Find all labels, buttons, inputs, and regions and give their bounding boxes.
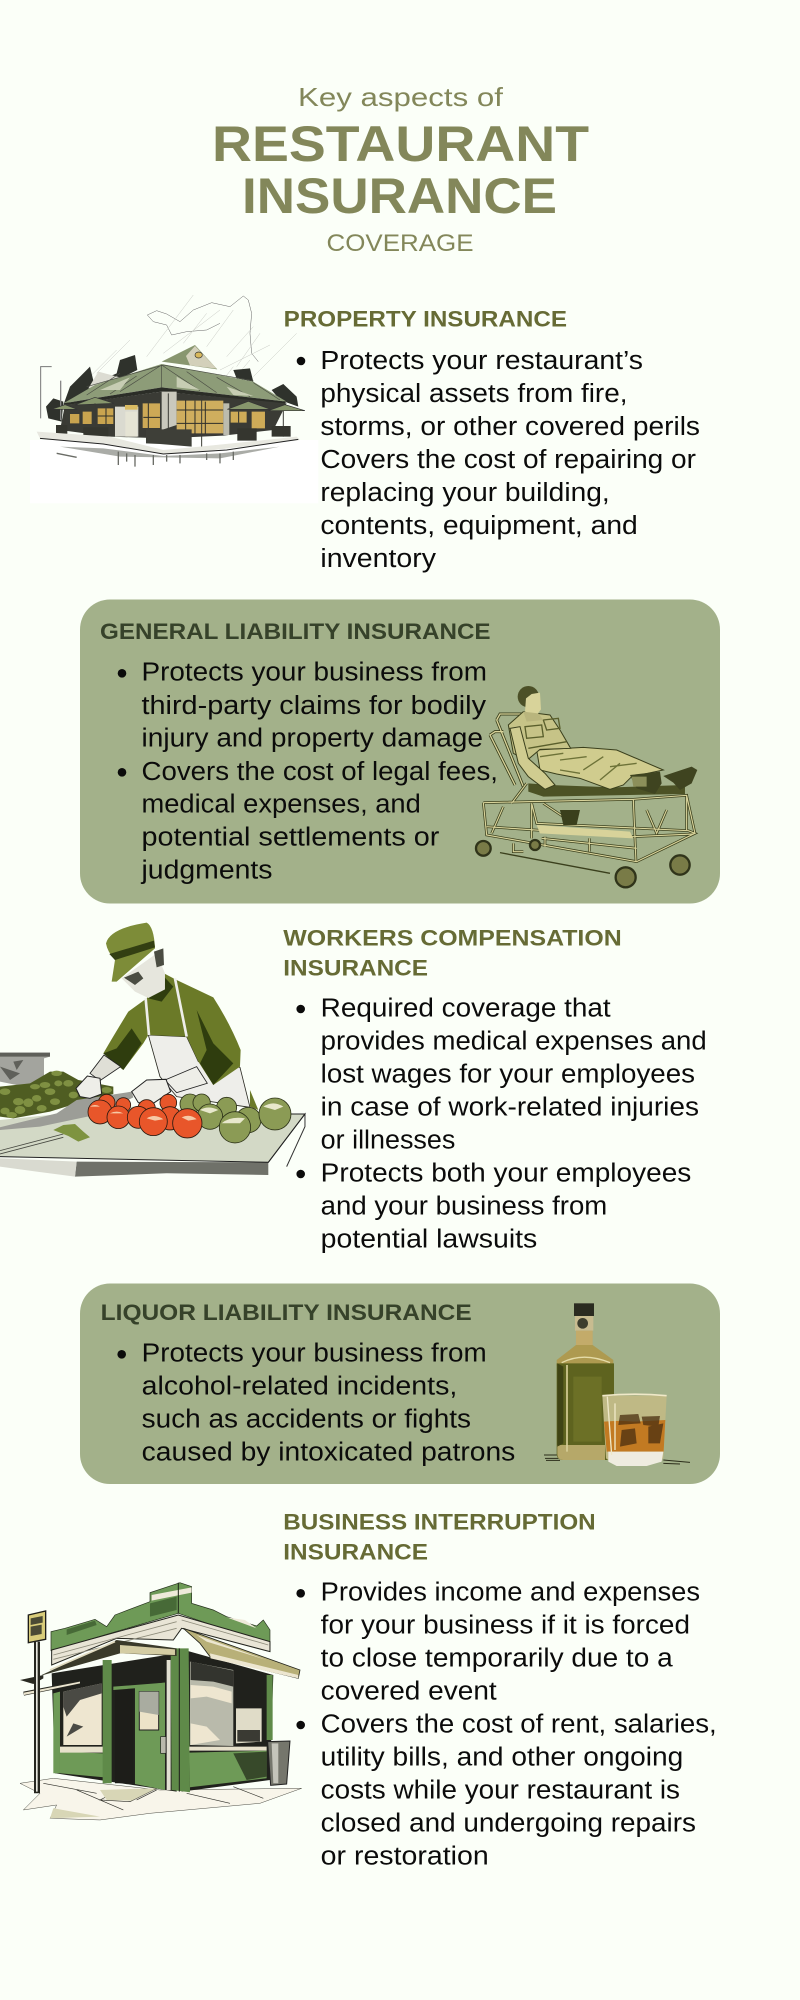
- bullet list: [321, 1579, 717, 1871]
- bullet list: in case of work-related injuries: [321, 1094, 699, 1122]
- bottle: [574, 1303, 594, 1316]
- bullet list: or illnesses: [321, 1126, 455, 1154]
- gurney frame: [483, 783, 695, 862]
- legs: [537, 747, 663, 789]
- illustration: whisky bottle and glass: [544, 1303, 690, 1466]
- walls: [52, 1648, 273, 1792]
- title block: [212, 82, 589, 257]
- boots: [630, 767, 697, 794]
- torso: [508, 712, 571, 761]
- bullet list: caused by intoxicated patrons: [142, 1439, 515, 1467]
- mattress: [528, 783, 685, 797]
- wheels: [476, 840, 690, 887]
- bullet list: replacing your building,: [320, 479, 610, 507]
- bullet list: [321, 995, 707, 1254]
- bullet list: injury and property damage: [142, 725, 483, 753]
- title: restaurant: RESTAURANT: [212, 116, 589, 172]
- bullet dot: [297, 357, 305, 365]
- bullet list: Protects both your employees: [321, 1160, 691, 1188]
- bullet list: Protects your business from: [142, 659, 487, 687]
- heading: INSURANCE: [283, 1539, 428, 1564]
- text: property insurance: [284, 307, 700, 573]
- glass: [602, 1396, 667, 1466]
- title: intro line: Key aspects of: [298, 82, 504, 112]
- bullet list: utility bills, and other ongoing: [321, 1744, 683, 1772]
- apron: [148, 1035, 250, 1107]
- bullet list: lost wages for your employees: [321, 1060, 695, 1088]
- heading: LIQUOR LIABILITY INSURANCE: [101, 1300, 472, 1325]
- bullet dots: [118, 669, 126, 777]
- sign on a pole: [34, 1642, 40, 1793]
- panel background: [80, 1284, 720, 1484]
- panel: general liability insurance: [80, 600, 720, 904]
- roof gable: [162, 345, 217, 369]
- illustration: restaurant building in a storm: [30, 295, 318, 503]
- panel background: [80, 600, 720, 904]
- green tomatoes: [180, 1094, 291, 1143]
- bullet list: potential lawsuits: [321, 1226, 537, 1254]
- white fascia: [52, 1615, 270, 1665]
- bullet dots: [296, 1005, 305, 1178]
- title: coverage: COVERAGE: [326, 230, 474, 257]
- green parapet: [51, 1583, 270, 1651]
- umbrellas: [52, 397, 305, 411]
- bullet list: or restoration: [321, 1843, 489, 1871]
- awnings: [42, 1640, 177, 1675]
- bullet dot: [117, 1350, 126, 1359]
- heading: BUSINESS INTERRUPTION: [283, 1509, 596, 1534]
- main roof: [63, 364, 287, 403]
- heading: WORKERS COMPENSATION: [283, 925, 622, 950]
- bullet list: Covers the cost of rent, salaries,: [321, 1711, 717, 1739]
- bullet list: medical expenses, and: [142, 791, 421, 819]
- table: [0, 1107, 305, 1162]
- bullet list: closed and undergoing repairs: [321, 1810, 696, 1838]
- trash can: [268, 1741, 290, 1785]
- pillars: [103, 1660, 112, 1783]
- chef jacket: [103, 973, 241, 1085]
- pile of green vegetables: [0, 1072, 113, 1118]
- heading: [283, 1509, 596, 1564]
- head: [518, 686, 539, 707]
- bullet list: Covers the cost of legal fees,: [142, 758, 498, 786]
- bullet list: to close temporarily due to a: [321, 1645, 674, 1673]
- bullet dots: [296, 1589, 305, 1729]
- cap: [106, 923, 155, 982]
- knife: [0, 1092, 133, 1130]
- chopped herbs: [53, 1124, 90, 1142]
- gurney back rest: [490, 714, 523, 787]
- bullet list: inventory: [320, 545, 436, 573]
- left window: [63, 1683, 102, 1745]
- illustration: injured man on a gurney: [476, 686, 697, 887]
- heading: INSURANCE: [283, 956, 428, 981]
- right window: [190, 1662, 233, 1746]
- red tomatoes: [88, 1094, 202, 1138]
- bullet list: such as accidents or fights: [142, 1406, 471, 1434]
- bullet list: Protects your restaurant’s: [320, 347, 643, 375]
- right base: [189, 1747, 267, 1751]
- left base: [60, 1752, 103, 1777]
- bullet list: [320, 347, 700, 573]
- heading: GENERAL LIABILITY INSURANCE: [100, 619, 491, 644]
- bullet list: covered event: [321, 1678, 497, 1706]
- door with notice: [115, 1687, 133, 1783]
- heading: [283, 925, 622, 981]
- bullet list: judgments: [140, 857, 272, 885]
- pavement: [20, 1778, 302, 1820]
- text: business interruption insurance: [283, 1509, 717, 1871]
- heading: PROPERTY INSURANCE: [284, 307, 567, 332]
- terrace furniture: [65, 393, 283, 447]
- bullet list: provides medical expenses and: [321, 1028, 707, 1056]
- bullet list: costs while your restaurant is: [321, 1777, 680, 1805]
- panel: liquor liability insurance: [80, 1284, 720, 1484]
- bullet list: Provides income and expenses: [321, 1579, 700, 1607]
- bullet list: for your business if it is forced: [321, 1612, 690, 1640]
- title: insurance: INSURANCE: [242, 168, 557, 224]
- bullet list: physical assets from fire,: [320, 380, 628, 408]
- steel container: [0, 1053, 50, 1088]
- arm: [510, 727, 555, 789]
- terrace and reflections: [37, 432, 300, 454]
- illustration: chef chopping tomatoes: [0, 923, 305, 1177]
- bullet list: Protects your business from: [142, 1340, 487, 1368]
- bullet list: storms, or other covered perils: [320, 413, 700, 441]
- bullet list: [140, 659, 498, 885]
- bullet list: Covers the cost of repairing or: [320, 446, 697, 474]
- bullet list: alcohol-related incidents,: [142, 1373, 457, 1401]
- bullet list: [142, 1340, 515, 1467]
- shadows: [544, 1455, 690, 1464]
- bullet list: Required coverage that: [321, 995, 611, 1023]
- forearms and hands: [90, 1055, 121, 1081]
- text: workers compensation insurance: [283, 925, 707, 1254]
- illustration: damaged storefront: [20, 1583, 302, 1820]
- head: [122, 953, 165, 998]
- bullet list: potential settlements or: [142, 824, 440, 852]
- walls and windows: [60, 392, 287, 438]
- bullet list: third-party claims for bodily: [142, 692, 486, 720]
- bullet list: and your business from: [321, 1192, 607, 1220]
- bullet list: contents, equipment, and: [320, 512, 638, 540]
